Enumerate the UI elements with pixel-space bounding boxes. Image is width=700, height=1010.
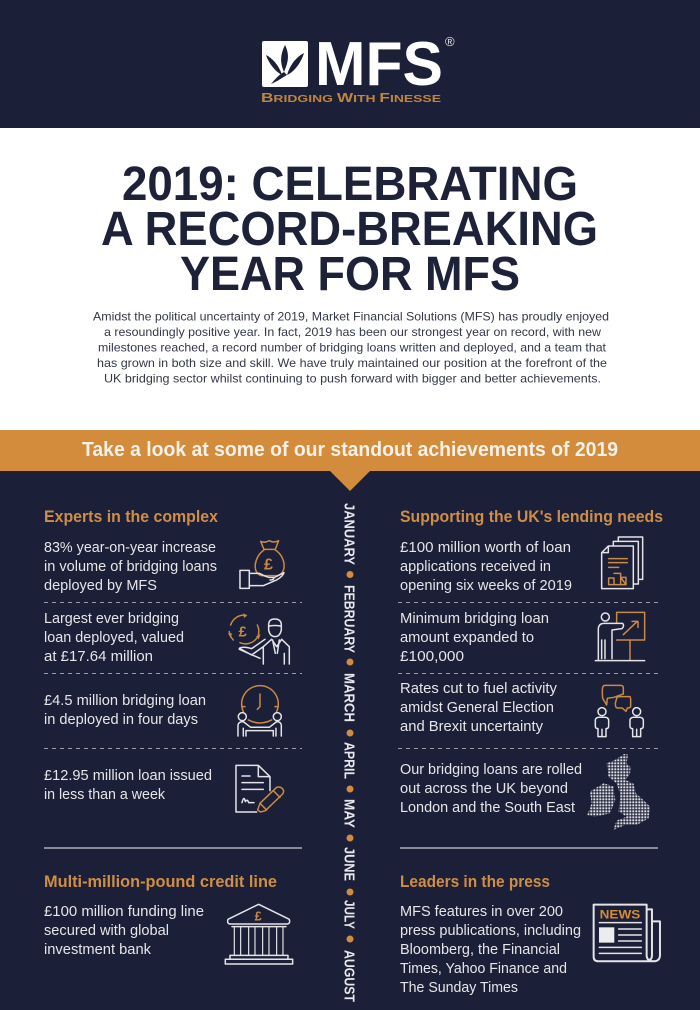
orange banner: Take a look at some of our standout achievements of 2019 [82,439,618,461]
logo: MFS [315,30,443,99]
icon: businessman with pound cycle: £ [239,625,247,641]
icon: clock with two people [238,686,281,736]
panel: leaders in the press [400,872,660,996]
dashed dividers [44,602,658,748]
logo: ® [445,34,455,49]
timeline: AUGUST [340,950,356,1002]
title [101,158,598,301]
timeline: JUNE [340,847,356,881]
text: rolled out: out across the UK beyond [400,781,568,797]
text: funding line [44,904,204,958]
solid dividers [44,847,658,849]
intro paragraph: UK bridging sector whilst continuing to push forward with bigger and better achievements. [104,372,601,386]
text: largest loan [44,611,184,665]
text: 83% increase: in volume of bridging loans [44,559,217,575]
heading: press: Leaders in the press [400,872,550,891]
orange banner [0,430,700,491]
text: 100 million applications [400,540,572,594]
icon: stacked documents [602,537,643,589]
text: 12.95 million: in less than a week [44,787,166,803]
text: minimum loan [400,611,549,665]
icon: newspaper: NEWS [600,907,640,921]
heading: supporting: Supporting the UK's lending needs [400,507,663,526]
icon: businessman with pound cycle [228,613,289,664]
heading: credit line: Multi-million-pound credit line [44,872,277,891]
icon: two people talking [595,685,643,737]
panel: white intro [0,128,700,430]
text: 4.5 million: £4.5 million bridging loan [44,693,206,709]
icon: signed document with pen [236,765,284,812]
text: largest loan: at £17.64 million [44,649,153,665]
text: rolled out: Our bridging loans are rolled [400,762,582,778]
icon: dotted UK map [587,754,650,830]
timeline: APRIL [340,742,356,779]
panel: credit line [44,872,293,964]
icon: newspaper [594,905,660,961]
intro paragraph: has grown in both size and skill. We have truly maintained our position at the forefront of the [97,357,607,370]
title: YEAR FOR MFS [180,248,520,301]
text: press publications: MFS features in over 200 [400,904,563,920]
text: 83% increase: 83% year-on-year increase [44,540,216,556]
text: rolled out [400,762,582,816]
text: 83% increase [44,540,217,594]
text: 12.95 million: £12.95 million loan issued [44,768,212,784]
text: minimum loan: amount expanded to [400,630,534,646]
timeline: MAY [340,799,356,828]
panel: experts in the complex [44,507,289,812]
intro paragraph [93,310,609,386]
text: 100 million applications: applications received in [400,559,551,575]
icon: presenter with chart [595,612,645,661]
text: press publications [400,904,581,996]
logo [261,30,455,105]
text: minimum loan: £100,000 [400,649,464,665]
text: largest loan: loan deployed, valued [44,630,184,646]
text: 100 million applications: opening six weeks of 2019 [400,578,572,594]
text: 83% increase: deployed by MFS [44,578,157,594]
text: 4.5 million: in deployed in four days [44,712,198,728]
text: 12.95 million [44,768,212,803]
text: press publications: Bloomberg, the Financial [400,942,560,958]
text: minimum loan: Minimum bridging loan [400,611,549,627]
logo: B RIDGING W ITH FINESSE [261,90,441,105]
icon: bank [225,904,293,964]
panel: supporting the UK's lending needs [400,507,663,830]
timeline [340,503,356,1002]
text: press publications: press publications, including [400,923,581,939]
timeline: JULY [340,900,356,929]
text: rates cut: Rates cut to fuel activity [400,681,558,697]
icon: bank: £ [255,910,262,924]
text: rolled out: London and the South East [400,800,575,816]
text: 100 million applications: £100 million worth of loan [400,540,571,556]
intro paragraph: milestones reached, a record number of bridging loans written and deployed, and a team that [98,342,607,354]
text: press publications: The Sunday Times [400,980,518,996]
text: 4.5 million [44,693,206,728]
timeline: JANUARY [340,503,356,565]
text: largest loan: Largest ever bridging [44,611,179,627]
heading: experts: Experts in the complex [44,507,218,526]
text: rates cut: amidst General Election [400,700,554,716]
intro paragraph: a resoundingly positive year. In fact, 2019 has been our strongest year on record, with new [104,326,602,339]
text: rates cut [400,681,558,735]
text: rates cut: and Brexit uncertainty [400,719,544,735]
timeline: FEBRUARY [340,585,356,653]
icon: money bag on hand [240,541,284,588]
title: 2019: CELEBRATING [122,158,578,211]
timeline: MARCH [340,673,356,722]
title: A RECORD-BREAKING [101,203,598,256]
intro paragraph: Amidst the political uncertainty of 2019, Market Financial Solutions (MFS) has proudly enjoyed [93,310,609,324]
text: funding line: £100 million funding line [44,904,204,920]
text: funding line: secured with global [44,923,169,939]
text: press publications: Times, Yahoo Finance and [400,961,567,977]
text: funding line: investment bank [44,942,152,958]
icon: money bag on hand: £ [264,556,273,573]
